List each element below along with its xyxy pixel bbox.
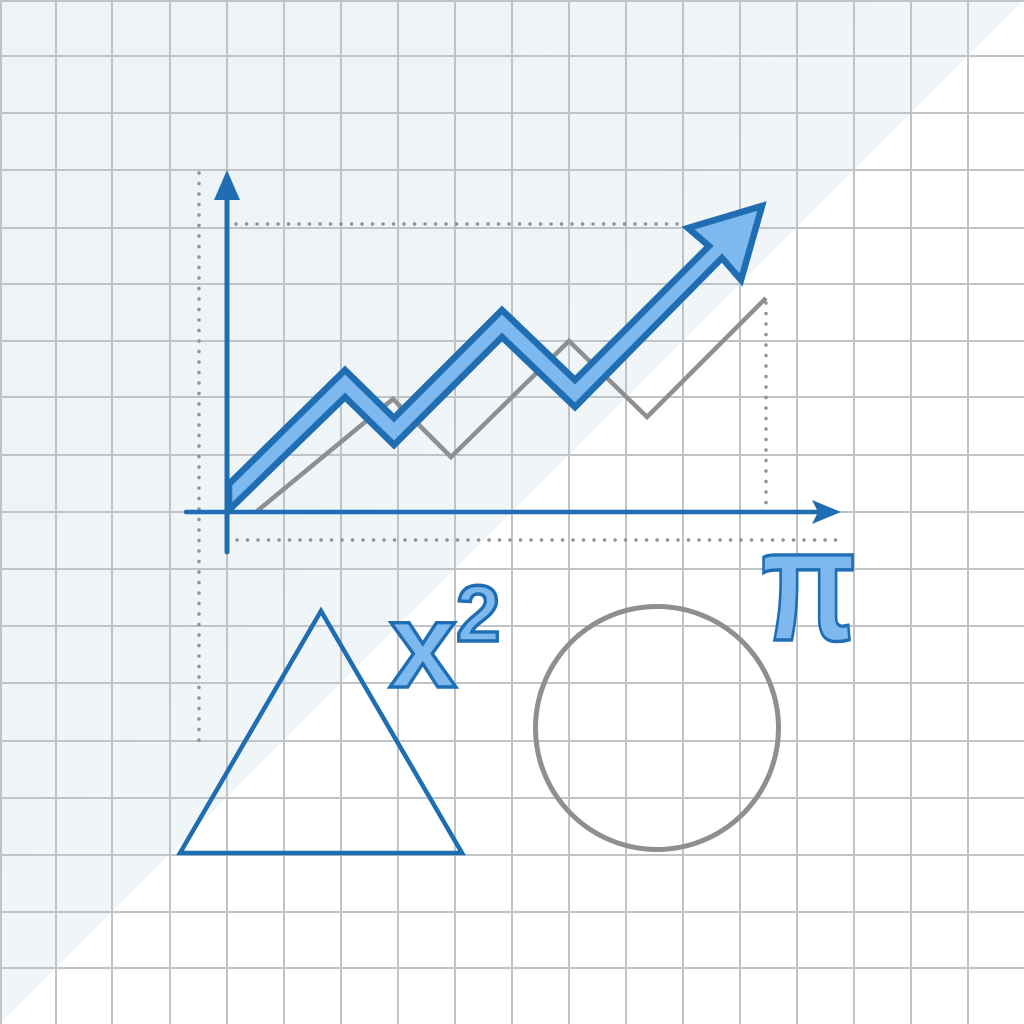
x squared label	[389, 569, 500, 713]
pi symbol: π	[761, 495, 856, 675]
rising blue arrow	[229, 206, 762, 510]
circle	[536, 606, 778, 850]
dotted guide lines	[199, 173, 836, 742]
x squared label: x	[389, 577, 457, 713]
triangle	[180, 611, 462, 853]
grey comparison line	[256, 298, 766, 512]
x squared label: 2	[456, 569, 500, 658]
x axis	[186, 500, 841, 524]
y axis	[214, 170, 240, 552]
